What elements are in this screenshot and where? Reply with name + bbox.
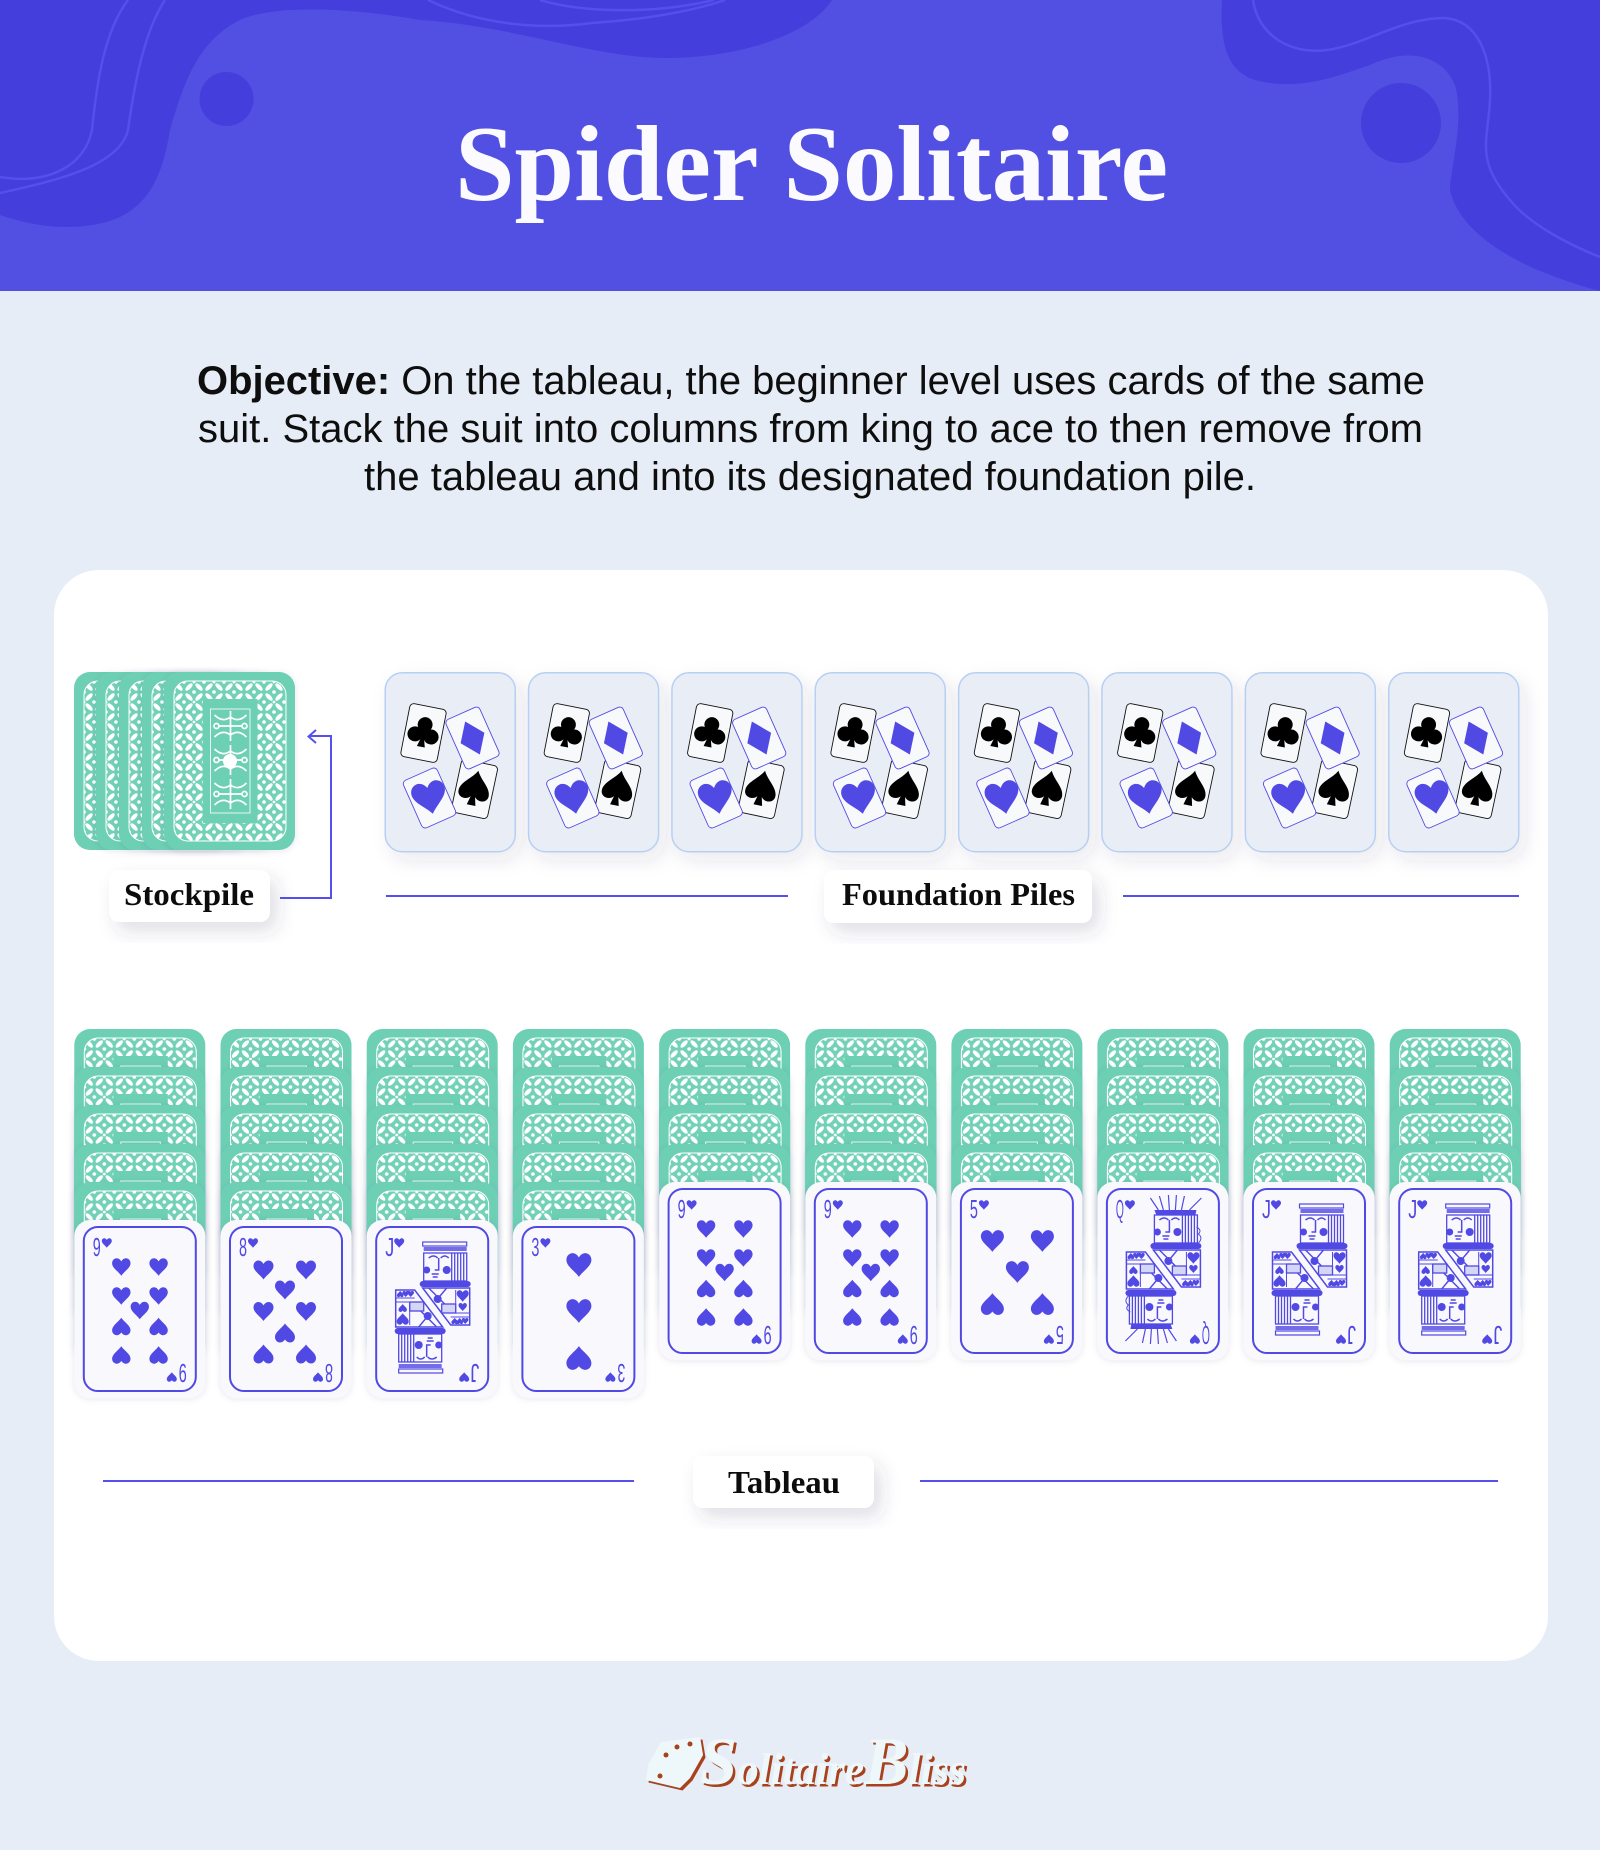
tableau column 9: jack: J: [1347, 1320, 1356, 1350]
objective text block: the tableau and into its designated foundation pile.: [364, 455, 1256, 499]
tableau column 6: nine: 9: [910, 1320, 918, 1350]
tableau column 1: nine: 9: [179, 1358, 187, 1388]
tableau column 2: eight: 8: [239, 1232, 247, 1262]
foundation piles label: Foundation Piles: [842, 876, 1075, 912]
objective text block: suit. Stack the suit into columns from king to ace to then remove from: [198, 407, 1423, 451]
tableau column 9: jack: [1244, 1029, 1374, 1360]
icon: card fan: [646, 1737, 703, 1788]
objective text block: Objective: On the tableau, the beginner level uses cards of the same: [197, 359, 1425, 403]
tableau column 3: jack: J: [385, 1232, 394, 1262]
tableau column 8: queen: [1097, 1029, 1228, 1360]
tableau column 10: jack: [1390, 1029, 1521, 1360]
panel: game board: [54, 570, 1548, 1661]
tableau column 4: three: 3: [531, 1232, 539, 1262]
tableau column 2: eight: 8: [325, 1358, 333, 1388]
tableau column 3: jack: [367, 1029, 498, 1398]
logo wordmark: SolitaireBliss: [700, 1723, 966, 1799]
header banner: [0, 0, 1600, 291]
stockpile cards: [74, 672, 295, 850]
tableau column 7: five: 5: [1056, 1320, 1064, 1350]
arrow: stockpile recycle: [280, 730, 331, 898]
foundation piles: [385, 673, 1519, 852]
tableau column 6: nine: [805, 1029, 936, 1360]
tableau column 5: nine: 9: [764, 1320, 772, 1350]
stockpile label: [109, 870, 270, 922]
tableau column 1: nine: 9: [93, 1232, 101, 1262]
tableau column 4: three: 3: [617, 1358, 625, 1388]
tableau column 5: nine: 9: [678, 1194, 686, 1224]
foundation piles label: [386, 870, 1519, 923]
stockpile label: Stockpile: [124, 876, 254, 912]
objective text block: [197, 359, 1425, 499]
logo: Solitaire Bliss: [646, 1723, 966, 1799]
tableau column 8: queen: Q: [1116, 1194, 1124, 1224]
tableau column 7: five: 5: [970, 1194, 978, 1224]
tableau column 5: nine: [659, 1029, 790, 1360]
tableau label: [103, 1456, 1498, 1508]
tableau column 8: queen: Q: [1202, 1320, 1210, 1350]
tableau column 6: nine: 9: [824, 1194, 832, 1224]
tableau column 1: nine: [74, 1029, 205, 1398]
tableau column 2: eight: [220, 1029, 352, 1398]
tableau column 3: jack: J: [470, 1358, 479, 1388]
tableau label: Tableau: [728, 1464, 840, 1500]
tableau column 10: jack: J: [1493, 1320, 1502, 1350]
tableau column 9: jack: J: [1262, 1194, 1271, 1224]
tableau column 7: five: [951, 1029, 1082, 1360]
tableau column 4: three: [513, 1029, 644, 1398]
tableau column 10: jack: J: [1408, 1194, 1417, 1224]
title: Spider Solitaire: [455, 105, 1168, 224]
